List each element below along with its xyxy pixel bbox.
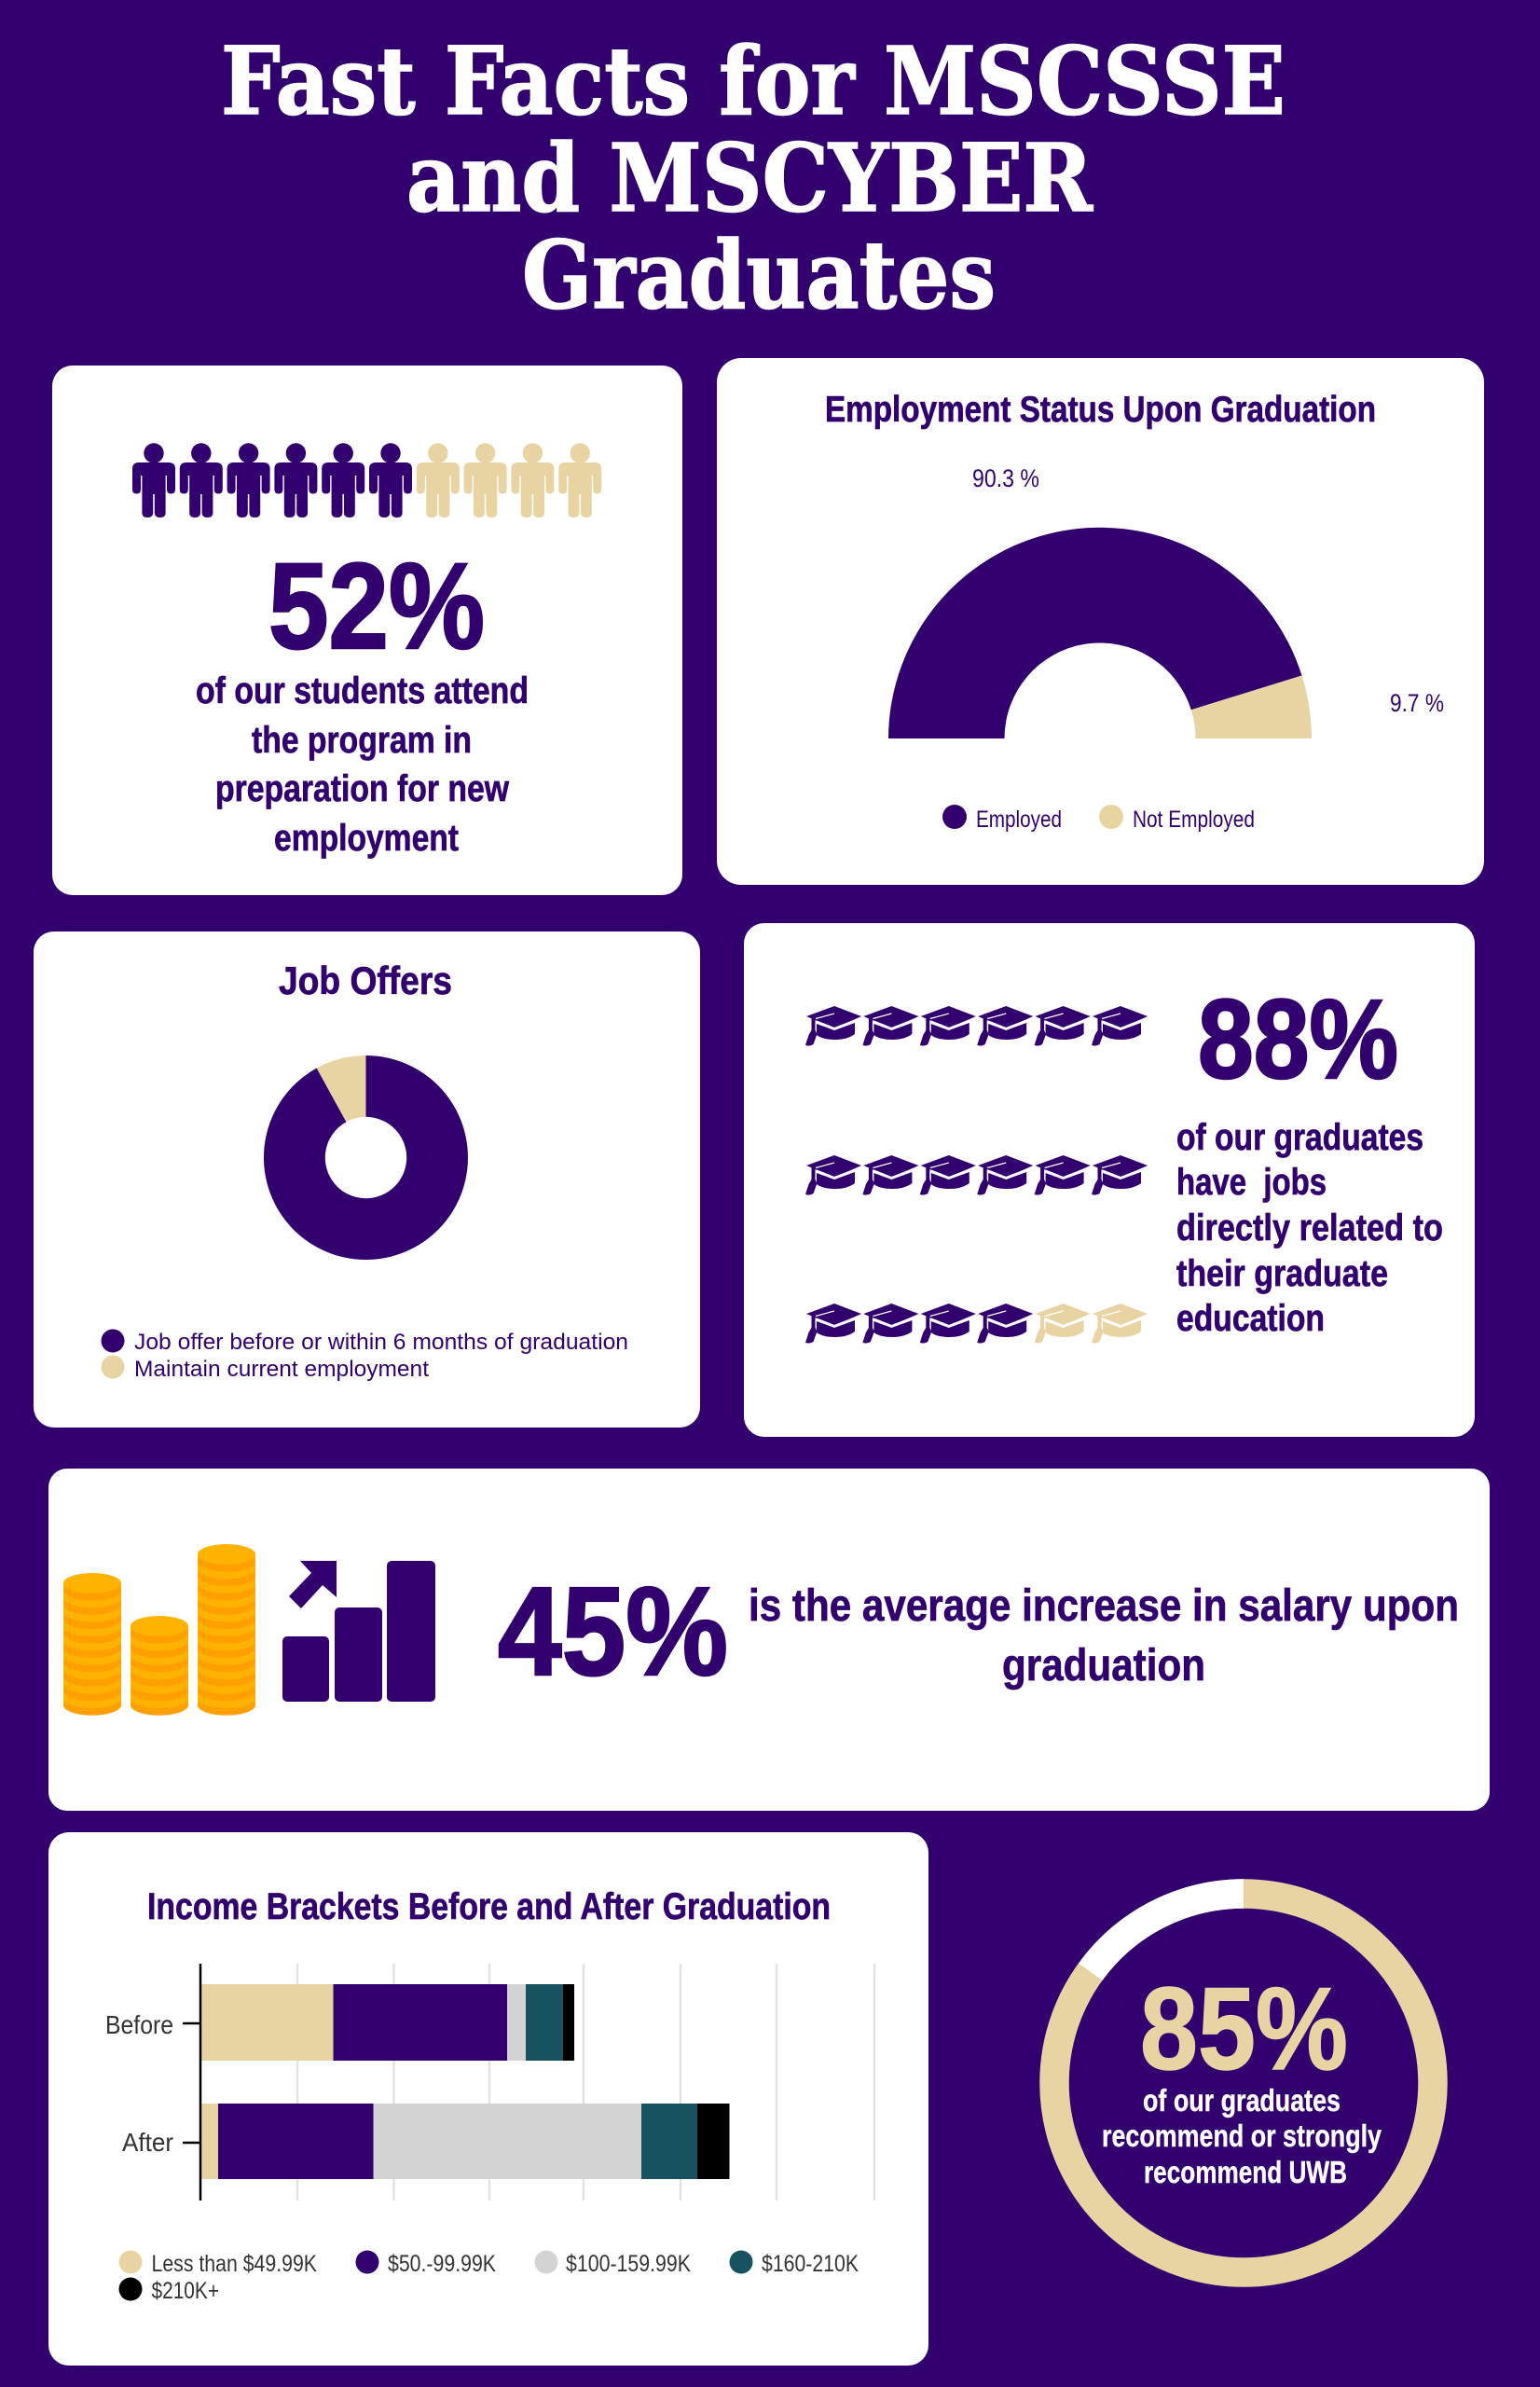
title: and MSCYBER [406,123,1093,233]
description text: preparation for new [215,768,510,809]
legend [101,1330,628,1382]
description text [749,1581,1459,1690]
description text: the program in [252,720,472,761]
description text: graduation [1002,1641,1205,1690]
legend: Employed [976,807,1062,833]
title: Fast Facts for MSCSSE [221,26,1286,136]
title [221,26,1286,330]
legend [942,805,1255,833]
axis label: Before: Before [105,2010,173,2039]
description text: their graduate [1176,1253,1388,1294]
description text: recommend or strongly [1102,2118,1382,2153]
legend: $50.-99.99K [388,2251,496,2277]
panel: employment status upon graduation [717,358,1484,885]
legend [119,2251,859,2304]
legend: Less than $49.99K [151,2251,317,2277]
icon row: ten people, six purple and four gold [132,443,601,517]
stacked bar chart [105,1964,874,2201]
heading: Job Offers [279,959,452,1002]
description text: employment [274,818,459,859]
description text: recommend UWB [1144,2155,1347,2189]
label: 9.7 %: 9.7 % [1390,689,1444,717]
legend: Maintain current employment [134,1357,429,1382]
panel: income brackets before and after graduation [48,1832,928,2366]
icon rows: graduation caps [805,1006,1148,1344]
title: Graduates [522,220,996,330]
axis label: After: After [122,2128,173,2157]
statistic: 45%: 45% [498,1561,728,1702]
legend: $100-159.99K [566,2251,691,2277]
description text: education [1176,1298,1325,1339]
description text: have jobs [1176,1162,1327,1203]
label: 90.3 %: 90.3 % [972,464,1039,492]
semi-donut chart [888,528,1312,738]
heading: Income Brackets Before and After Graduation [147,1886,831,1927]
statistic: 52%: 52% [268,537,485,674]
axis and tick marks [183,1964,200,2201]
bar: after [201,2104,729,2179]
description text [196,670,529,859]
legend: Not Employed [1133,807,1255,833]
legend: Job offer before or within 6 months of graduation [134,1330,628,1355]
ring chart [1054,1894,1433,2272]
donut chart [264,1056,468,1260]
panel: 45% average salary increase [48,1469,1490,1811]
description text: of our graduates [1176,1117,1423,1158]
description text: is the average increase in salary upon [749,1581,1459,1631]
panel: job offers [34,931,700,1428]
description text [1102,2083,1382,2189]
callout: 85% recommend UWB [1054,1894,1433,2272]
description text: of our students attend [196,670,529,711]
legend: $160-210K [762,2251,859,2277]
panel: 88% of graduates have related jobs [744,923,1475,1437]
description text: of our graduates [1143,2083,1341,2118]
description text: directly related to [1176,1207,1443,1249]
icon: rising bars with arrow [282,1561,435,1702]
heading: Employment Status Upon Graduation [825,390,1376,430]
bar: before [201,1984,574,2061]
icon: gold coin stacks [63,1544,255,1716]
panel: 52% of students preparing for new employment [52,366,682,895]
legend: $210K+ [151,2278,219,2304]
statistic: 88%: 88% [1198,975,1398,1102]
statistic: 85%: 85% [1140,1965,1348,2094]
description text [1176,1117,1443,1339]
